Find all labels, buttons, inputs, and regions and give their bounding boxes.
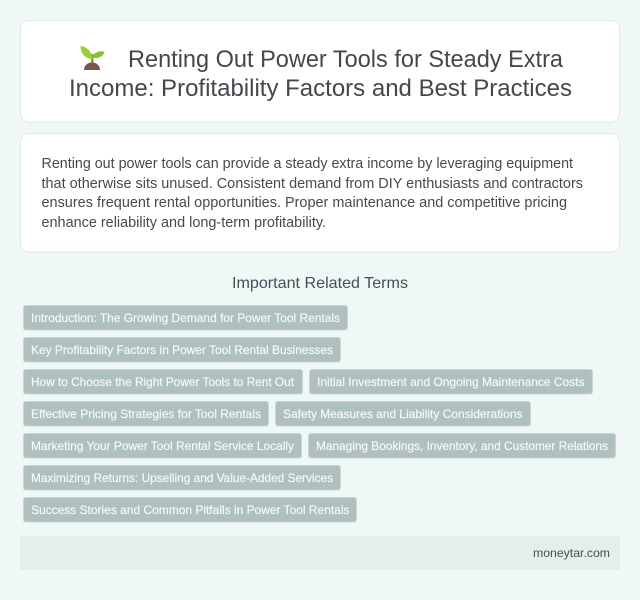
text block: intro paragraph: enhance reliability and long-term profitability. <box>42 215 326 231</box>
heading: title: Renting Out Power Tools for Steady Extra <box>128 46 564 73</box>
tag: pricing strategies: Effective Pricing Strategies for Tool Rentals <box>31 407 261 421</box>
tag: profitability factors: Key Profitability Factors in Power Tool Rental Businesses <box>31 343 333 357</box>
tag: marketing: Marketing Your Power Tool Rental Service Locally <box>31 439 294 453</box>
text block: intro paragraph: ensures frequent rental opportunities. Proper maintenance and competitive pricing <box>42 195 567 211</box>
tag: investment and costs: Initial Investment and Ongoing Maintenance Costs <box>317 375 584 389</box>
panel: intro paragraph card <box>20 134 620 252</box>
text block: intro paragraph: Renting out power tools can provide a steady extra income by leveraging equipment <box>42 156 573 172</box>
tag: bookings and inventory <box>308 434 616 458</box>
tag: introduction: Introduction: The Growing Demand for Power Tool Rentals <box>31 311 340 325</box>
tag: maximizing returns <box>24 466 340 490</box>
tag: marketing <box>24 434 302 458</box>
tag: success stories <box>24 498 356 522</box>
tag: introduction <box>24 306 348 330</box>
footer: moneytar.com <box>533 546 610 560</box>
heading: title <box>69 46 572 102</box>
footer <box>20 536 620 570</box>
tag: choosing tools <box>24 370 302 394</box>
heading: title: Income: Profitability Factors and Best Practices <box>69 75 572 102</box>
text block: intro paragraph <box>42 156 583 231</box>
tag: investment and costs <box>310 370 592 394</box>
heading: important related terms: Important Related Terms <box>232 275 408 292</box>
tag: profitability factors <box>24 338 340 362</box>
tag: safety and liability <box>276 402 530 426</box>
tag: safety and liability: Safety Measures and Liability Considerations <box>283 407 522 421</box>
panel: title card <box>20 20 620 122</box>
tag: success stories: Success Stories and Common Pitfalls in Power Tool Rentals <box>31 503 350 517</box>
text block: intro paragraph: that otherwise sits unused. Consistent demand from DIY enthusiasts and contractors <box>42 176 583 192</box>
tag: bookings and inventory: Managing Bookings, Inventory, and Customer Relations <box>316 439 608 453</box>
panel: related term tags <box>24 306 616 522</box>
tag: pricing strategies <box>24 402 268 426</box>
tag: maximizing returns: Maximizing Returns: Upselling and Value-Added Services <box>31 471 333 485</box>
icon: seedling <box>80 46 104 70</box>
tag: choosing tools: How to Choose the Right Power Tools to Rent Out <box>31 375 295 389</box>
